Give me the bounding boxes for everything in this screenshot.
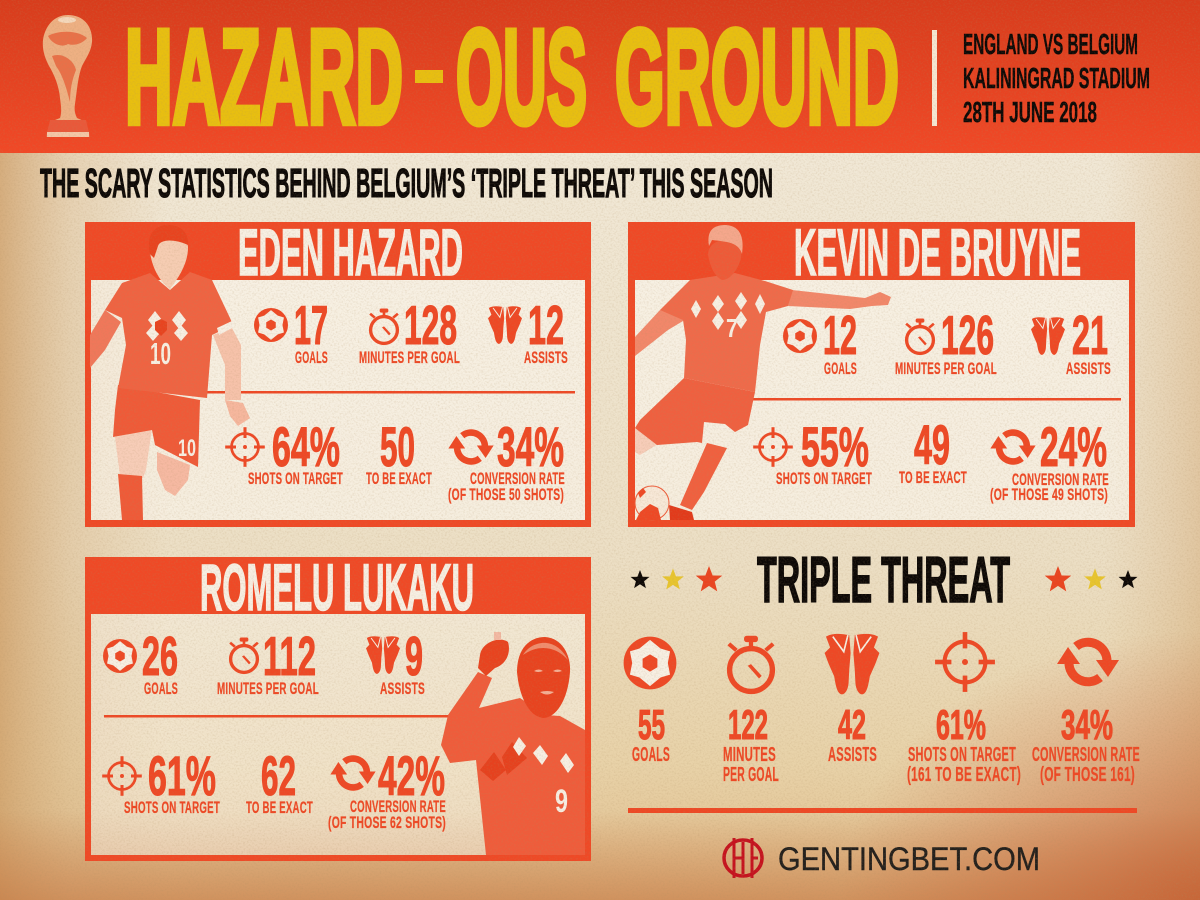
panel: Romelu Lukaku: ROMELU LUKAKU [200, 550, 474, 624]
player: Kevin De Bruyne [635, 225, 891, 520]
stat: minutes per goal: 112 [263, 625, 316, 687]
stat: goals: GOALS [295, 348, 328, 367]
stat: conversion rate: CONVERSION RATE [470, 469, 565, 488]
icon: shots on target [935, 632, 995, 692]
stat: minutes per goal: 128 [404, 294, 457, 356]
stat: shots on target: SHOTS ON TARGET [124, 798, 220, 817]
icon: goals [783, 319, 817, 353]
player: Eden Hazard: 10 [150, 336, 171, 371]
stat: shots on target total: SHOTS ON TARGET [908, 744, 1016, 766]
player: Eden Hazard: 10 [178, 435, 196, 462]
stat: goals [294, 294, 328, 367]
stat: conversion rate [990, 415, 1109, 504]
stat: minutes per goal [895, 304, 997, 378]
player: Romelu Lukaku: 9 [555, 783, 568, 819]
stat: conversion rate: CONVERSION RATE [1012, 470, 1109, 489]
icon: goals [624, 637, 676, 689]
stat: goals: 12 [823, 304, 857, 366]
stat: assists [1066, 304, 1111, 378]
panel: Romelu Lukaku [85, 550, 591, 861]
stat: conversion rate: (OF THOSE 50 SHOTS) [448, 485, 564, 504]
panel: Eden Hazard: EDEN HAZARD [238, 215, 463, 289]
icon: assists [366, 636, 400, 674]
stat: minutes per goal: MINUTES PER GOAL [895, 359, 997, 378]
stat: assists total [828, 701, 877, 766]
icon: minutes per goal [369, 309, 399, 343]
stat: shots on target [124, 744, 220, 817]
icon: world cup trophy [43, 15, 92, 137]
wordmark: GENTINGBET.COM [778, 841, 1040, 877]
player: Eden Hazard [90, 225, 250, 520]
icon: goals [254, 308, 288, 342]
stat: assists: ASSISTS [1066, 359, 1111, 378]
stat: conversion rate total [1032, 701, 1140, 786]
stat: conversion rate total: (OF THOSE 161) [1040, 764, 1135, 786]
stat: shots exact: TO BE EXACT [899, 468, 967, 487]
logo: Gentingbet [724, 838, 1040, 878]
icon: assists [488, 306, 522, 344]
stat: minutes per goal: 126 [941, 304, 994, 366]
stat: assists: 9 [405, 625, 423, 687]
stat: shots exact [366, 415, 432, 488]
stat: conversion rate [448, 415, 565, 504]
stat: goals: GOALS [144, 679, 178, 698]
divider [628, 808, 1137, 813]
stat: shots exact: TO BE EXACT [366, 469, 432, 488]
stat: conversion rate: (OF THOSE 62 SHOTS) [328, 813, 446, 832]
stat: shots on target total: (161 TO BE EXACT) [907, 764, 1021, 786]
panel: Kevin De Bruyne [628, 215, 1135, 527]
stat: conversion rate: (OF THOSE 49 SHOTS) [990, 485, 1108, 504]
stat: minutes per goal total: 122 [728, 701, 768, 748]
stat: shots on target: 55% [801, 415, 869, 478]
player: Romelu Lukaku [441, 632, 585, 855]
stat: conversion rate: 42% [378, 744, 445, 807]
stat: shots exact: 49 [914, 413, 950, 476]
stars: left [630, 566, 722, 591]
stat: minutes per goal: MINUTES PER GOAL [217, 679, 319, 698]
stat: shots on target [776, 415, 872, 488]
stat: minutes per goal [359, 294, 460, 367]
divider: header [932, 30, 937, 126]
stat: conversion rate: 34% [497, 415, 564, 478]
stat: conversion rate [328, 744, 446, 832]
stat: assists total: ASSISTS [828, 744, 877, 766]
match details: 28TH JUNE 2018 [963, 97, 1097, 129]
stat: shots exact: 62 [261, 744, 296, 807]
header band [0, 0, 1200, 153]
divider [104, 715, 450, 718]
icon: minutes per goal [229, 638, 259, 672]
icon: goals [103, 639, 137, 673]
icon: conversion rate [1057, 642, 1119, 682]
stat: shots exact [246, 744, 313, 817]
icon: assists [825, 634, 879, 694]
stars: right [1045, 566, 1138, 591]
player: Kevin De Bruyne: 7 [726, 313, 738, 343]
icon: assists [1031, 317, 1065, 355]
stat: assists: 12 [528, 294, 564, 356]
stat: goals total: GOALS [632, 744, 670, 766]
stat: goals [142, 625, 178, 698]
title: HAZARD [125, 3, 403, 152]
stat: shots on target total [907, 701, 1021, 786]
stat: goals: 17 [294, 294, 328, 356]
match details [963, 29, 1150, 129]
stat: goals [823, 304, 857, 378]
stat: assists total: 42 [838, 701, 866, 748]
stat: minutes per goal [217, 625, 319, 698]
stat: minutes per goal total: MINUTES [723, 744, 776, 766]
stat: goals: GOALS [824, 359, 857, 378]
divider [750, 398, 1121, 400]
icon: conversion rate [990, 433, 1036, 461]
stat: shots on target: SHOTS ON TARGET [248, 469, 343, 488]
stat: conversion rate: CONVERSION RATE [350, 797, 446, 816]
stat: shots on target: SHOTS ON TARGET [776, 469, 872, 488]
text: GROUND [615, 3, 899, 152]
stat: minutes per goal: MINUTES PER GOAL [359, 348, 460, 367]
stat: assists: 21 [1072, 304, 1108, 366]
stat: minutes per goal total [723, 701, 779, 786]
stat: shots on target: 64% [272, 415, 340, 478]
stat: shots exact [899, 413, 967, 487]
stat: assists: ASSISTS [524, 348, 568, 367]
stat: conversion rate: 24% [1040, 415, 1107, 478]
icon: shots on target [225, 427, 265, 467]
divider [200, 391, 575, 394]
stat: goals: 26 [142, 625, 178, 687]
stat: shots exact: TO BE EXACT [246, 798, 313, 817]
stat: assists [380, 625, 425, 698]
stat: shots on target: 61% [148, 744, 216, 807]
icon: conversion rate [448, 433, 494, 461]
stat: assists [524, 294, 568, 367]
stat: minutes per goal total: PER GOAL [723, 764, 779, 786]
title: OUS [456, 3, 587, 152]
stat: shots on target [248, 415, 343, 488]
icon: minutes per goal [727, 636, 775, 691]
stat: shots exact: 50 [380, 415, 415, 478]
stat: conversion rate total: 34% [1061, 701, 1113, 748]
icon: shots on target [753, 427, 793, 467]
stat: shots on target total: 61% [936, 701, 986, 748]
icon: shots on target [102, 756, 142, 796]
stat: goals total: 55 [638, 701, 665, 748]
icon: conversion rate [330, 759, 376, 787]
icon: minutes per goal [905, 319, 935, 353]
panel: Triple Threat totals [624, 543, 1140, 813]
panel: Eden Hazard [85, 215, 591, 527]
stat: goals total [632, 701, 670, 766]
stat: assists: ASSISTS [380, 679, 425, 698]
